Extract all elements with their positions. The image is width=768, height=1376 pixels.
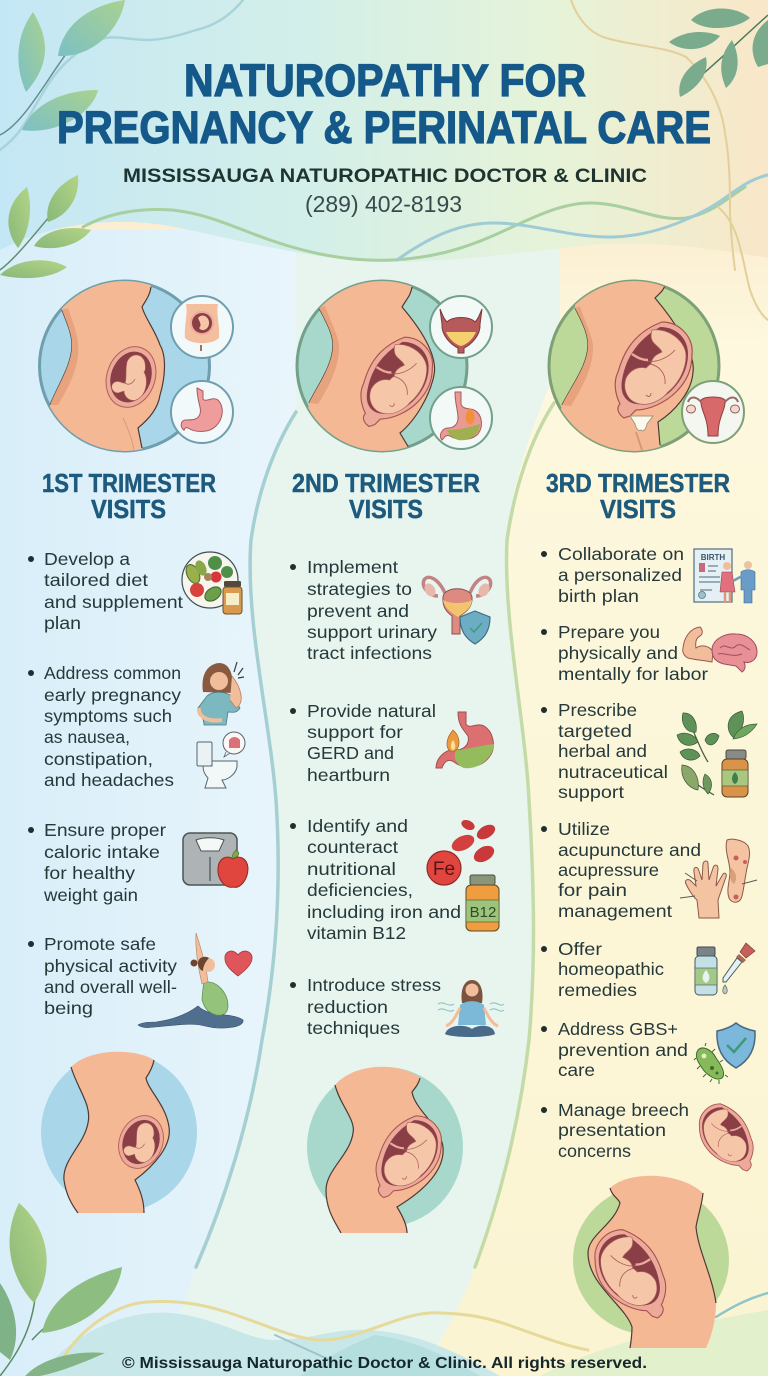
inset: uterus in abdomen	[171, 296, 233, 358]
bullet: acupuncture and acupressure: acupressure	[558, 860, 659, 880]
bullet: caloric intake: caloric intake	[44, 842, 160, 862]
bullet: early pregnancy symptoms	[28, 663, 181, 790]
bullet: urinary tract infections: strategies to	[307, 579, 412, 599]
heading: 1st trimester visits: 1ST TRIMESTER	[42, 468, 216, 498]
bullet: homeopathic remedies	[541, 939, 664, 1000]
bullet: herbal and nutraceutical support: support	[558, 782, 624, 802]
icon: red blood cells, iron and B12 bottle: B12	[470, 904, 496, 921]
bullet: early pregnancy symptoms: and headaches	[44, 770, 174, 790]
bullet: birth plan: birth plan	[558, 586, 639, 606]
bullet: GERD and heartburn: heartburn	[307, 765, 390, 785]
bullet: breech presentation: Manage breech	[558, 1100, 689, 1120]
inset: bladder	[430, 296, 492, 358]
bullet: homeopathic remedies: Offer	[558, 939, 602, 959]
illustration: first trimester belly	[40, 270, 210, 460]
bullet: prepare for labor: mentally for labor	[558, 664, 708, 684]
bullet: nutritional deficiencies: vitamin B12	[307, 923, 406, 943]
bullet: early pregnancy symptoms: early pregnancy	[44, 685, 181, 705]
bullet: urinary tract infections: Implement	[307, 557, 398, 577]
bullet: birth plan	[541, 544, 684, 606]
bullet: acupuncture and acupressure: Utilize	[558, 819, 610, 839]
panel: 3rd trimester	[541, 270, 757, 1348]
bullet: physical activity	[28, 934, 177, 1018]
icon: red blood cells, iron and B12 bottle	[427, 818, 499, 931]
heading: 3rd trimester visits: VISITS	[600, 494, 676, 524]
bullet: breech presentation: concerns	[558, 1141, 631, 1161]
bullet: GERD and heartburn	[290, 701, 436, 785]
bullet: acupuncture and acupressure: for pain	[558, 880, 627, 900]
bullet: early pregnancy symptoms: constipation,	[44, 749, 153, 769]
bullet: stress reduction	[290, 975, 441, 1038]
bullet: birth plan: a personalized	[558, 565, 682, 585]
bullet: breech presentation: presentation	[558, 1120, 666, 1140]
icon: stomach with flame	[436, 712, 494, 768]
title	[57, 55, 711, 153]
footer copyright: © Mississauga Naturopathic Doctor & Clinic. All rights reserved.	[122, 1355, 647, 1372]
bullet: diet and supplement	[28, 549, 183, 633]
bullet: early pregnancy symptoms: Address common	[44, 663, 181, 683]
panel: 1st trimester	[28, 270, 252, 1213]
bullet: herbal and nutraceutical support	[541, 700, 668, 802]
bullet: acupuncture and acupressure: management	[558, 901, 672, 921]
heading: 3rd trimester visits: 3RD TRIMESTER	[546, 468, 730, 498]
bullet: nutritional deficiencies: counteract	[307, 837, 398, 857]
heading: 1st trimester visits: VISITS	[91, 494, 166, 524]
heading: 2nd trimester visits: VISITS	[349, 494, 423, 524]
icon: salad plate and supplement bottle	[182, 552, 242, 614]
icon: breech uterus	[699, 1104, 753, 1171]
illustration: third trimester belly, lower	[573, 1176, 729, 1348]
bullet: urinary tract infections: support urinary	[307, 622, 437, 642]
bullet: physical activity: Promote safe	[44, 934, 156, 954]
bullet: herbal and nutraceutical support: targeted	[558, 721, 632, 741]
bullet: GBS+ prevention: Address GBS+	[558, 1019, 678, 1039]
bullet: breech presentation	[541, 1100, 689, 1161]
icon: remedy bottle and dropper	[695, 943, 755, 995]
icon: birth plan document with people	[694, 549, 755, 603]
heading: 1st trimester visits	[42, 468, 216, 524]
bullet: stress reduction: reduction	[307, 997, 388, 1017]
inset: stomach	[171, 381, 233, 443]
bullet: GBS+ prevention: care	[558, 1060, 595, 1080]
bullet: nutritional deficiencies: Identify and	[307, 816, 408, 836]
icon: flexed arm and brain	[683, 627, 757, 672]
subtitle: clinic name: MISSISSAUGA NATUROPATHIC DOCTOR & CLINIC	[123, 166, 647, 187]
bullet: homeopathic remedies: remedies	[558, 980, 637, 1000]
icon: herbs and supplement bottle	[677, 711, 757, 797]
bullet: diet and supplement: Develop a	[44, 549, 130, 569]
bullet: GERD and heartburn: GERD and	[307, 743, 394, 763]
bullet: prepare for labor: Prepare you	[558, 622, 660, 642]
bullet: GERD and heartburn: support for	[307, 722, 403, 742]
bullet: diet and supplement: plan	[44, 613, 81, 633]
leaves: left of header	[0, 175, 91, 278]
icon: meditating woman	[438, 980, 504, 1037]
bullet: birth plan: Collaborate on	[558, 544, 684, 564]
bullet: prepare for labor: physically and	[558, 643, 678, 663]
bullet: urinary tract infections: tract infections	[307, 643, 432, 663]
leaves: top left	[0, 0, 125, 135]
phone number: (289) 402-8193	[305, 191, 462, 217]
inset: stomach with heartburn	[430, 387, 492, 449]
heading: 2nd trimester visits: 2ND TRIMESTER	[292, 468, 480, 498]
bullet: GBS+ prevention	[541, 1019, 688, 1080]
illustration: third trimester belly	[549, 270, 719, 460]
bullet: acupuncture and acupressure: acupuncture and	[558, 840, 701, 860]
bullet: nutritional deficiencies	[290, 816, 461, 943]
illustration: first trimester belly, lower	[41, 1052, 197, 1213]
icon: birth plan document with people: BIRTH	[701, 553, 725, 562]
icon: hand and foot	[680, 839, 757, 918]
bullet: early pregnancy symptoms: symptoms such	[44, 706, 172, 726]
bullet: caloric intake: Ensure proper	[44, 820, 166, 840]
bullet: caloric intake	[28, 820, 166, 905]
bullet: herbal and nutraceutical support: herbal and	[558, 741, 647, 761]
bullet: nutritional deficiencies: including iron and	[307, 902, 461, 922]
icon: shield and bacterium	[694, 1023, 755, 1084]
icon: red blood cells, iron and B12 bottle: Fe	[433, 859, 455, 880]
bullet: urinary tract infections: prevent and	[307, 601, 409, 621]
bullet: diet and supplement: tailored diet	[44, 570, 148, 590]
bullet: GBS+ prevention: prevention and	[558, 1040, 688, 1060]
bullet: urinary tract infections	[290, 557, 437, 663]
bullet: early pregnancy symptoms: as nausea,	[44, 727, 130, 747]
leaves: bottom left	[0, 1203, 122, 1376]
icon: toilet	[197, 732, 245, 788]
icon: urinary tract and shield	[422, 577, 492, 644]
leaves: top right	[669, 8, 768, 97]
illustration: second trimester belly	[297, 270, 467, 460]
bullet: GERD and heartburn: Provide natural	[307, 701, 436, 721]
bullet: caloric intake: for healthy	[44, 863, 135, 883]
title: NATUROPATHY FOR	[184, 55, 586, 106]
icon: scale and apple	[183, 833, 248, 887]
illustration: second trimester belly, lower	[307, 1067, 463, 1233]
bullet: homeopathic remedies: homeopathic	[558, 959, 664, 979]
bullet: caloric intake: weight gain	[43, 885, 138, 905]
bullet: nutritional deficiencies: nutritional	[307, 859, 396, 879]
bullet: herbal and nutraceutical support: nutraceutical	[558, 762, 668, 782]
heading: 2nd trimester visits	[292, 468, 480, 524]
bullet: stress reduction: techniques	[307, 1018, 400, 1038]
bullet: physical activity: physical activity	[44, 956, 177, 976]
icon: prenatal yoga pose and heart	[138, 933, 252, 1028]
bullet: stress reduction: Introduce stress	[307, 975, 441, 995]
heading: 3rd trimester visits	[546, 468, 730, 524]
bullet: acupuncture and acupressure	[541, 819, 701, 921]
icon: woman with headache	[198, 662, 244, 725]
bullet: physical activity: and overall well-	[44, 977, 177, 997]
bullet: nutritional deficiencies: deficiencies,	[307, 880, 413, 900]
bullet: physical activity: being	[44, 998, 93, 1018]
bullet: herbal and nutraceutical support: Prescribe	[558, 700, 637, 720]
inset: uterus and ovaries	[682, 381, 744, 443]
bullet: prepare for labor	[541, 622, 708, 684]
bullet: diet and supplement: and supplement	[44, 592, 183, 612]
panel: 2nd trimester	[290, 270, 504, 1233]
